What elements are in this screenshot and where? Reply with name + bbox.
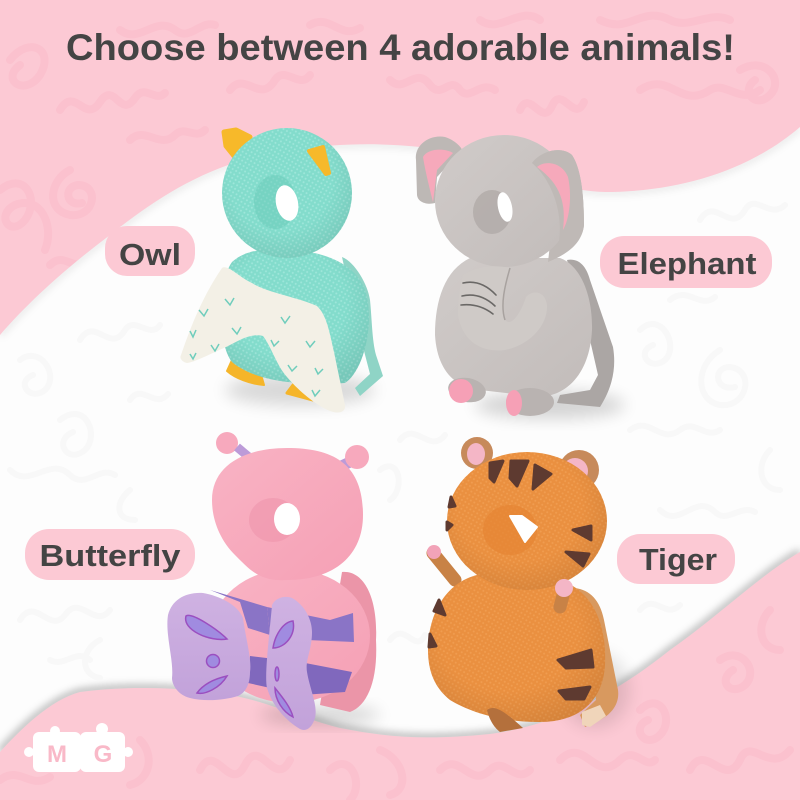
- elephant plush: [416, 135, 625, 419]
- butterfly wings: [167, 593, 250, 700]
- label: Butterfly: [25, 529, 195, 580]
- tiger stripes: [429, 461, 593, 699]
- title: Choose between 4 adorable animals!: [66, 27, 735, 68]
- logo: MG puzzle pieces: G: [94, 741, 112, 768]
- owl wing: [180, 267, 345, 413]
- logo: MG puzzle pieces: M: [47, 741, 67, 768]
- tiger plush: [427, 437, 630, 732]
- label: Owl: Owl: [119, 237, 181, 272]
- label: Butterfly: Butterfly: [40, 538, 181, 573]
- label: Owl: [105, 226, 195, 276]
- label: Tiger: [617, 534, 735, 584]
- butterfly plush: [167, 432, 380, 730]
- elephant trunk: [458, 266, 547, 350]
- panel edge shadow and faint squiggles: [0, 127, 800, 752]
- label: Elephant: [600, 236, 772, 288]
- owl plush: [180, 128, 383, 413]
- label: Elephant: Elephant: [618, 246, 756, 281]
- label: Tiger: Tiger: [639, 542, 717, 577]
- white wavy panel: [0, 127, 800, 752]
- logo: MG puzzle pieces: [24, 723, 133, 772]
